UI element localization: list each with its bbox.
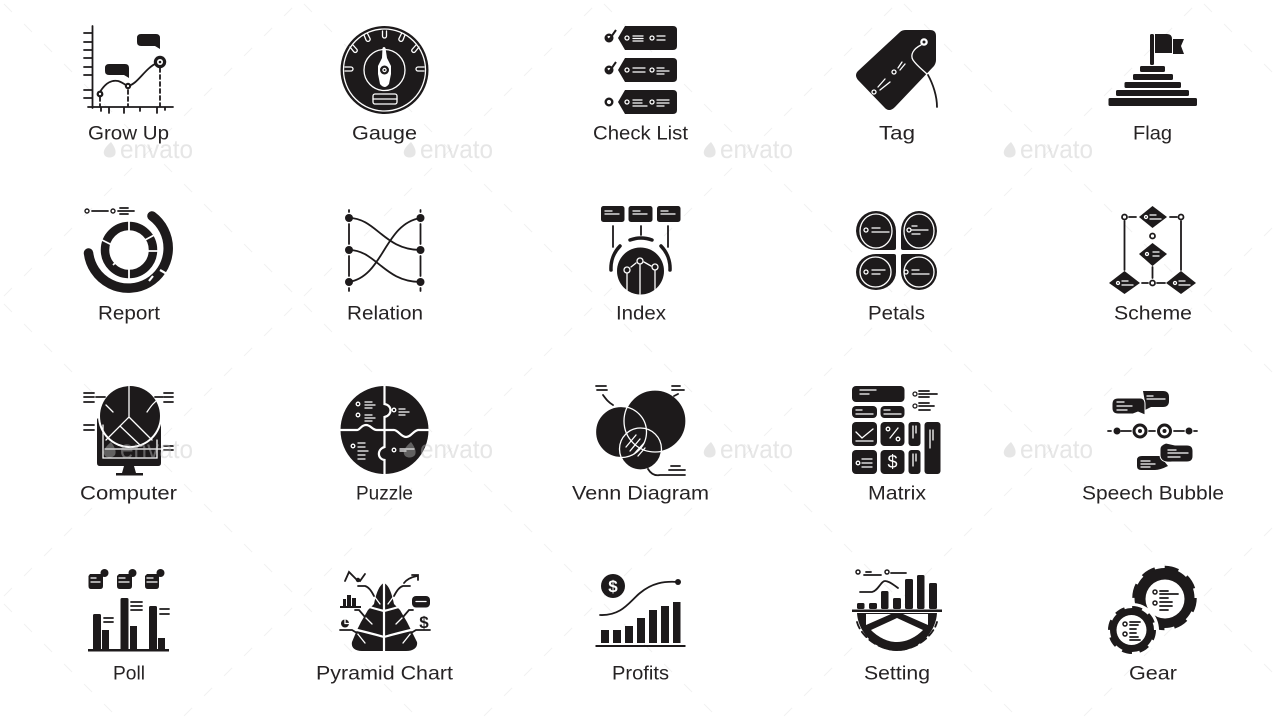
icon: computer with pie chart xyxy=(84,384,173,476)
icon: flag on stepped pyramid xyxy=(1108,34,1197,106)
watermark: envato row 1 xyxy=(104,134,1093,164)
watermark: envato row 3: envato xyxy=(1020,434,1093,464)
icon: puzzle circle xyxy=(340,385,429,475)
label: Puzzle: Puzzle xyxy=(356,482,413,504)
label: Grow Up: Grow Up xyxy=(88,122,169,144)
watermark: envato row 1: envato xyxy=(1020,134,1093,164)
label: Setting: Setting xyxy=(864,662,930,684)
label: Profits: Profits xyxy=(612,662,669,684)
watermark: envato row 1: envato xyxy=(420,134,493,164)
icon: matrix calculator: $ xyxy=(887,452,898,472)
watermark: envato row 3: envato xyxy=(120,434,193,464)
icon: matrix calculator xyxy=(852,386,940,474)
label: Gauge: Gauge xyxy=(352,122,417,144)
label: Speech Bubble: Speech Bubble xyxy=(1082,482,1224,504)
label: Report: Report xyxy=(98,302,161,324)
label: Poll: Poll xyxy=(113,662,145,684)
icon: profits growth chart: $ xyxy=(608,577,618,596)
icon: gauge xyxy=(340,26,428,114)
label: Check List: Check List xyxy=(593,122,689,144)
watermark: envato row 3: envato xyxy=(720,434,793,464)
icon: pyramid chart xyxy=(340,572,430,652)
icon: scheme flowchart xyxy=(1109,206,1196,294)
label: Matrix: Matrix xyxy=(868,482,926,504)
icon: grow up line chart xyxy=(84,26,173,113)
label: Computer: Computer xyxy=(80,482,178,504)
icon: gears xyxy=(1105,568,1195,657)
watermark: envato row 3: envato xyxy=(420,434,493,464)
label: Venn Diagram: Venn Diagram xyxy=(572,482,709,504)
watermark: envato row 1: envato xyxy=(720,134,793,164)
icon: venn diagram xyxy=(596,386,686,475)
icon: profits growth chart xyxy=(596,574,686,647)
label: Relation: Relation xyxy=(347,302,423,324)
icon: setting gear with chart xyxy=(852,570,942,651)
icon: check list tags xyxy=(606,26,677,114)
icon: index dome xyxy=(601,206,680,294)
label: Petals: Petals xyxy=(868,302,925,324)
label: Tag: Tag xyxy=(879,122,915,144)
icon: pyramid chart: $ xyxy=(419,613,429,632)
watermark: envato row 1: envato xyxy=(120,134,193,164)
label: Pyramid Chart: Pyramid Chart xyxy=(316,662,454,684)
label: Flag: Flag xyxy=(1133,122,1172,144)
icon: four petals xyxy=(856,211,937,290)
watermark: envato row 3 xyxy=(104,434,1093,464)
label: Index: Index xyxy=(616,302,666,324)
icon: report donut xyxy=(85,208,168,288)
icon: poll bar chart xyxy=(88,569,169,652)
icon: speech bubbles with timeline xyxy=(1108,391,1197,470)
icon: price tag xyxy=(856,30,937,110)
label: Gear: Gear xyxy=(1129,662,1178,684)
icon: relation diagram xyxy=(345,210,424,291)
label: Scheme: Scheme xyxy=(1114,302,1192,324)
